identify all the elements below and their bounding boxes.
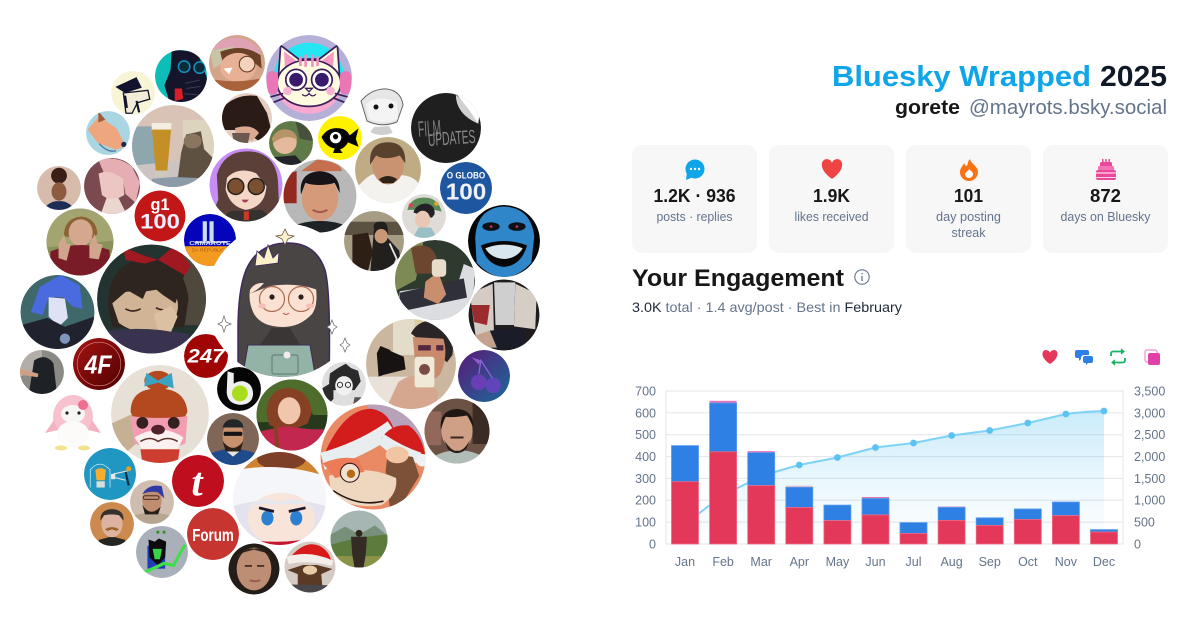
avatar: O Globo 100 logo: O GLOBO xyxy=(447,171,485,181)
avatar: man hugging dog xyxy=(344,211,404,271)
avatar: Camarote da Republica logo: CAMAROTE xyxy=(189,241,231,247)
chart: month labels: Jan xyxy=(675,555,695,569)
title: Bluesky Wrapped 2025: Bluesky Wrapped xyxy=(832,61,1091,93)
chart: right axis labels: 1,500 xyxy=(1134,472,1165,486)
avatar: cat with headphones xyxy=(266,35,352,121)
avatar: sleepy anime girl with red bow xyxy=(97,244,206,354)
icon: likes legend heart xyxy=(1042,350,1058,364)
panel: posting streak stat: 101 xyxy=(954,186,983,206)
avatar: pink-haired anime girl xyxy=(84,158,140,214)
avatar: hooded figure in dark xyxy=(20,350,64,394)
avatar: man with black cat and mug xyxy=(366,319,456,409)
panel: posts and replies stat: 1.2K · 936 xyxy=(654,186,736,206)
avatar: t logo: t xyxy=(191,460,204,505)
avatar: Forum logo xyxy=(187,508,239,560)
chart: month labels: Nov xyxy=(1055,555,1078,569)
icon: heart xyxy=(822,159,842,179)
chart: left axis labels: 400 xyxy=(635,450,656,464)
avatar: plush doll with reindeer hat xyxy=(233,449,326,547)
avatar: man with middle fingers xyxy=(46,208,114,276)
avatar: cartoon girl with glasses xyxy=(210,148,282,222)
text: engagement summary: 3.0K total · 1.4 avg/post · Best in February xyxy=(632,299,902,315)
icon: hello kitty penguin plush xyxy=(45,395,101,450)
avatar: g1 100 logo: g1 xyxy=(150,196,170,214)
icon: flame xyxy=(960,159,978,181)
avatar: Camarote da Republica logo: DA REPÚBLICA xyxy=(192,247,228,252)
avatar: low-poly bear xyxy=(86,111,130,155)
avatar: film updates sticker xyxy=(411,93,482,163)
avatar: santa dragon illustration xyxy=(320,404,429,510)
chart: month labels: Feb xyxy=(712,555,734,569)
chart: left axis labels: 300 xyxy=(635,472,656,486)
panel: likes received stat xyxy=(769,145,894,253)
avatar: t logo xyxy=(172,455,224,507)
avatar: woman with eyes closed xyxy=(228,544,280,594)
chart legend icons xyxy=(1042,349,1160,365)
avatar: pug officer sketch xyxy=(111,71,155,115)
chart: left axis labels xyxy=(635,384,656,551)
avatar: man crying in white shirt xyxy=(355,137,421,203)
chart: stacked monthly bars xyxy=(672,401,1118,544)
panel: avatar bubble cluster xyxy=(20,35,540,594)
avatar: film updates sticker: UPDATES xyxy=(427,127,476,151)
chart: month labels: Mar xyxy=(750,555,772,569)
chart: month labels xyxy=(675,555,1115,569)
avatar: cherries on purple xyxy=(458,350,510,402)
avatar: cartoon with pink hat xyxy=(209,35,265,91)
avatar: blue-haired anime character xyxy=(20,275,94,349)
title: Bluesky Wrapped 2025: 2025 xyxy=(1100,61,1167,93)
heading: Your Engagement: Your Engagement xyxy=(632,265,844,292)
icon: info xyxy=(855,270,869,284)
chart: right axis labels: 2,000 xyxy=(1134,450,1165,464)
panel: likes received stat: likes received xyxy=(794,210,869,224)
panel: posting streak stat: day posting xyxy=(936,210,1001,224)
icon: replies legend bubbles xyxy=(1075,350,1093,365)
chart: right axis labels: 0 xyxy=(1134,537,1141,551)
chart: month labels: Jul xyxy=(906,555,921,569)
avatar: Forum logo: Forum xyxy=(192,525,234,545)
avatar: 4F logo xyxy=(73,338,125,390)
avatar: Camarote da Republica logo xyxy=(184,214,236,266)
avatar: yellow eye-fish logo xyxy=(318,116,362,160)
icon: birthday cake xyxy=(1096,159,1116,180)
chart: right axis labels xyxy=(1134,384,1165,551)
avatar: blond man xyxy=(269,121,313,165)
avatar: anime girl in red dress xyxy=(256,380,328,450)
avatar: beer and cat photo xyxy=(132,105,214,187)
avatar: gizmo with santa hat xyxy=(284,542,336,592)
avatar: 247 logo: 247 xyxy=(186,346,226,368)
panel: days on Bluesky stat xyxy=(1043,145,1168,253)
avatar: bearded young man xyxy=(424,398,490,464)
panel: days on Bluesky stat: days on Bluesky xyxy=(1060,210,1151,224)
heading: user name and handle: gorete xyxy=(895,97,960,119)
panel: days on Bluesky stat: 872 xyxy=(1090,186,1121,206)
avatar: 4F logo: 4F xyxy=(84,349,112,379)
avatar: bearded man with sunglasses xyxy=(207,413,259,465)
chart: left axis labels: 500 xyxy=(635,428,656,442)
avatar: otter toy xyxy=(111,365,209,463)
chart: right axis labels: 1,000 xyxy=(1134,494,1165,508)
avatar: blue grinning monster xyxy=(468,205,540,277)
panel: likes received stat: 1.9K xyxy=(813,186,850,206)
avatar: O Globo 100 logo: 100 xyxy=(446,178,486,204)
chart: month labels: Jun xyxy=(865,555,886,569)
chart: right axis labels: 3,500 xyxy=(1134,384,1165,398)
illustration: girl with crown and sparkles xyxy=(206,223,360,380)
chart: month labels: Apr xyxy=(790,555,809,569)
heading: user name and handle: @mayrots.bsky.social xyxy=(969,97,1167,119)
chart: engagement by month xyxy=(635,384,1165,569)
icon: quotes legend copies xyxy=(1145,350,1160,365)
chart: month labels: Aug xyxy=(940,555,963,569)
avatar: darth vader with glasses xyxy=(155,50,208,102)
avatar: man with mustache xyxy=(90,502,134,546)
avatar: person with flower crown xyxy=(402,194,446,238)
panel: posting streak stat: streak xyxy=(952,226,986,240)
avatar: g1 100 logo xyxy=(134,190,186,242)
chart: month labels: Oct xyxy=(1018,555,1038,569)
chart: month labels: May xyxy=(826,555,850,569)
panel: posting streak stat xyxy=(906,145,1031,253)
avatar: black b logo xyxy=(217,367,261,411)
avatar: grey sketch girl xyxy=(360,88,404,135)
chart: right axis labels: 3,000 xyxy=(1134,406,1165,420)
chart: left axis labels: 200 xyxy=(635,494,656,508)
chart: month labels: Dec xyxy=(1093,555,1115,569)
icon: chat bubble xyxy=(686,160,704,180)
chart: right axis labels: 2,500 xyxy=(1134,428,1165,442)
avatar: person in racing jacket xyxy=(468,280,540,350)
panel: posts and replies stat: posts · replies xyxy=(656,210,732,224)
avatar: 247 logo xyxy=(184,334,228,378)
chart: month labels: Sep xyxy=(979,555,1001,569)
avatar: film updates sticker: FILM xyxy=(417,115,442,142)
avatar: green figure on grey xyxy=(136,526,188,578)
avatar: woman with afro bun xyxy=(37,166,81,210)
chart: cumulative area and line xyxy=(685,408,1107,544)
chart: left axis labels: 100 xyxy=(635,516,656,530)
avatar: man with blue hair and glasses xyxy=(130,480,174,524)
avatar: woman with dark hair xyxy=(222,93,272,143)
chart: right axis labels: 500 xyxy=(1134,516,1155,530)
panel: posts and replies stat xyxy=(632,145,757,253)
chart: left axis labels: 600 xyxy=(635,406,656,420)
avatar: O Globo 100 logo xyxy=(440,162,492,214)
avatar: manga portrait xyxy=(322,362,366,406)
icon: reposts legend arrows xyxy=(1111,349,1125,365)
avatar: man drinking xyxy=(395,240,475,320)
avatar: hiker in green landscape xyxy=(330,510,388,568)
avatar: blue lightbulb cage xyxy=(84,448,136,500)
avatar: smiling man selfie xyxy=(284,160,356,232)
avatar: g1 100 logo: 100 xyxy=(140,209,180,233)
chart: left axis labels: 0 xyxy=(649,537,656,551)
chart: left axis labels: 700 xyxy=(635,384,656,398)
